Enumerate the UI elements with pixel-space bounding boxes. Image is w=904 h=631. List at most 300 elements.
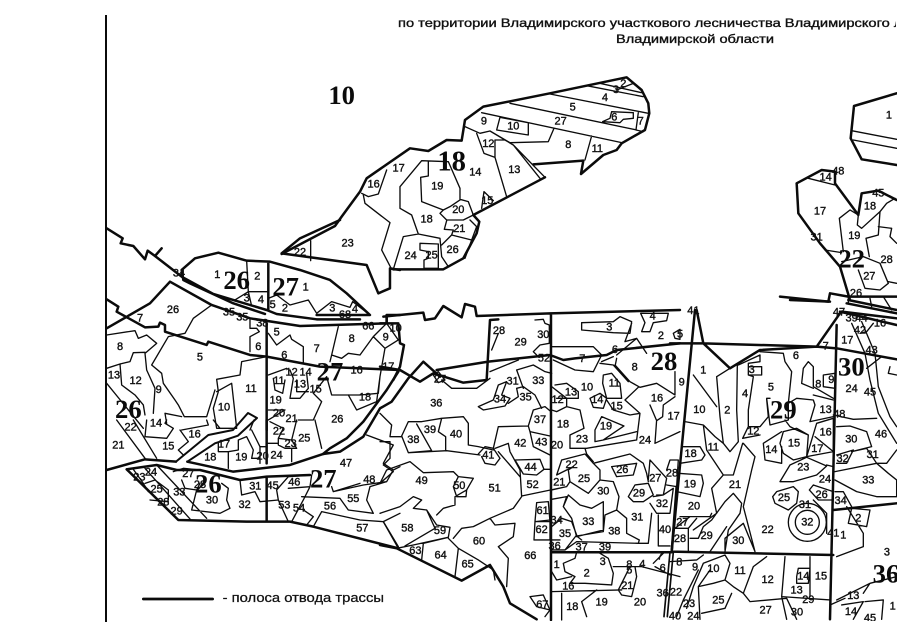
stand numbers: central: 15 [611, 401, 623, 413]
stand numbers: central: 38 [407, 434, 419, 446]
stand numbers: east: 47 [833, 306, 845, 318]
stand numbers: central: 35 [520, 392, 532, 404]
stand numbers: east: 43 [866, 345, 878, 357]
stand numbers: central: 29 [515, 337, 527, 349]
block numbers 26 and 27: 26 [223, 265, 250, 295]
stand numbers: upper blocks: 17 [382, 361, 394, 373]
stand numbers: block 18: 24 [405, 250, 417, 262]
stand numbers: upper blocks: 7 [314, 343, 320, 355]
stand numbers: upper blocks: 19 [270, 395, 282, 407]
stand numbers: central: 36 [430, 398, 442, 410]
stand numbers: east: 34 [835, 495, 847, 507]
stand numbers: east: 10 [693, 404, 705, 416]
stand numbers: central: 21 [553, 477, 565, 489]
stand numbers: block 22: 27 [863, 271, 875, 283]
stand numbers: upper blocks: 9 [383, 331, 389, 343]
stand numbers: block 18: 12 [482, 138, 494, 150]
stand numbers: central: 18 [557, 418, 569, 430]
stand numbers: upper blocks: 12 [286, 367, 298, 379]
stand numbers: east: 40 [669, 611, 681, 623]
block numbers 10 and 18: 10 [328, 80, 355, 110]
stand numbers: central: 20 [551, 439, 563, 451]
stand numbers: central: 67 [536, 599, 548, 611]
stand numbers: block 22: 18 [864, 201, 876, 213]
stand numbers: east: 9 [679, 376, 685, 388]
stand numbers: upper blocks: 35 [223, 307, 235, 319]
stand numbers: central: 12 [552, 394, 564, 406]
stand numbers: east: 45 [864, 386, 876, 398]
stand numbers: block 18: 22 [294, 247, 306, 259]
stand numbers: east: 6 [793, 350, 799, 362]
stand numbers: block 18: 11 [592, 143, 603, 155]
block numbers 26 and 27: 27 [317, 357, 343, 387]
stand numbers: central: 16 [562, 581, 574, 593]
stand numbers: east: 31 [867, 449, 879, 461]
stand numbers: central: 44 [525, 461, 537, 473]
stand numbers: central: 11 [609, 377, 620, 389]
road corridor through the centre [323, 362, 445, 454]
stand numbers: upper blocks: 1 [303, 281, 309, 293]
block numbers 29, 30, 36: 36 [873, 558, 899, 588]
stand numbers: east: 31 [799, 499, 811, 511]
stand numbers: block 18: 13 [508, 164, 520, 176]
stand numbers: central: 17 [668, 411, 680, 423]
stand numbers: lower blocks: 28 [157, 497, 169, 509]
blocks 26 and 27 upper [107, 220, 400, 430]
stand numbers: upper blocks: 66 [362, 321, 374, 333]
stand numbers: east: 21 [729, 479, 741, 491]
stand numbers: block 22: 26 [850, 287, 862, 299]
stand numbers: central: 14 [591, 394, 603, 406]
stand numbers: central: 34 [494, 393, 506, 405]
stand numbers: central [390, 311, 680, 613]
stand numbers: lower blocks: 54 [293, 502, 305, 514]
stand numbers: upper blocks: 9 [156, 384, 162, 396]
stand numbers: central: 63 [409, 545, 421, 557]
block numbers 26 and 27 (lower) [196, 470, 336, 493]
stand numbers: east: 5 [768, 382, 774, 394]
stand numbers: central: 40 [450, 428, 462, 440]
stand numbers: upper blocks: 4 [258, 294, 264, 306]
stand numbers: block 22: 19 [848, 230, 860, 242]
stand numbers: central: 23 [576, 433, 588, 445]
stand numbers: central: 26 [616, 464, 628, 476]
stand numbers: lower blocks: 20 [257, 451, 269, 463]
stand numbers: block 18: 14 [469, 167, 481, 179]
stand numbers: east: 9 [692, 562, 698, 574]
stand numbers: upper blocks: 38 [256, 318, 268, 330]
stand numbers: lower blocks: 55 [347, 493, 359, 505]
stand numbers: central: 38 [608, 526, 620, 538]
stand numbers: upper blocks: 12 [130, 375, 142, 387]
stand numbers: east: 10 [707, 563, 719, 575]
stand numbers: east: 1 [890, 601, 896, 613]
stand numbers: block 18: 9 [481, 116, 487, 128]
stand numbers: central: 52 [538, 352, 550, 364]
stand numbers: east: 23 [797, 462, 809, 474]
stand numbers: upper blocks: 4 [352, 303, 358, 315]
stand numbers: upper blocks: 34 [173, 267, 185, 279]
stand numbers: upper blocks: 10 [218, 402, 230, 414]
stand numbers: central: 3 [606, 321, 612, 333]
stand numbers: central: 30 [537, 329, 549, 341]
stand numbers: east: 22 [762, 524, 774, 536]
stand numbers: central: 37 [534, 414, 546, 426]
block numbers 26 and 27 [115, 265, 343, 424]
stand numbers: upper blocks: 5 [274, 326, 280, 338]
stand numbers: upper blocks: 68 [339, 309, 351, 321]
stand numbers: central: 2 [658, 330, 664, 342]
stand numbers: central: 6 [612, 344, 618, 356]
stand numbers: upper blocks: 26 [331, 413, 343, 425]
stand numbers: central: 32 [656, 498, 668, 510]
stand numbers: east: 8 [815, 378, 821, 390]
block number 28: 28 [651, 346, 677, 376]
stand numbers: block 18: 25 [426, 249, 438, 261]
stand numbers: upper blocks: 8 [349, 333, 355, 345]
stand numbers: east: 23 [683, 598, 695, 610]
stand numbers: central: 16 [651, 393, 663, 405]
stand numbers: east: 4 [742, 388, 748, 400]
title: Владимирской области [616, 32, 774, 46]
stand numbers: central: 58 [401, 522, 413, 534]
block 28 and central stands [380, 304, 680, 620]
stand numbers: central: 62 [536, 524, 548, 536]
stand numbers: lower blocks: 45 [267, 480, 279, 492]
stand numbers: lower blocks: 56 [324, 501, 336, 513]
stand numbers: central: 28 [493, 325, 505, 337]
stand numbers: lower blocks: 57 [356, 522, 368, 534]
stand numbers: block 18: 6 [611, 112, 617, 124]
block numbers 26 and 27 (lower): 27 [310, 463, 337, 493]
stand numbers: central: 18 [566, 601, 578, 613]
block numbers 29, 30, 36: 30 [838, 352, 865, 382]
stand numbers: block 18: 15 [481, 195, 493, 207]
stand numbers: central: 25 [578, 473, 590, 485]
stand numbers: block 18: 20 [452, 204, 464, 216]
stand numbers: central: 19 [600, 421, 612, 433]
stand numbers: east: 7 [823, 341, 829, 353]
stand numbers: block 18: 7 [638, 116, 644, 128]
stand numbers: central: 39 [424, 424, 436, 436]
stand numbers: east: 12 [747, 426, 759, 438]
stand numbers: east: 41 [687, 305, 699, 317]
stand numbers: lower blocks: 23 [285, 438, 297, 450]
stand numbers: block 18: 10 [507, 121, 519, 133]
stand numbers: block 18: 4 [602, 92, 608, 104]
stand numbers: block 18: 19 [431, 181, 443, 193]
stand numbers: central: 42 [514, 437, 526, 449]
stand numbers: block 22: 17 [814, 206, 826, 218]
stand numbers: upper blocks: 6 [281, 350, 287, 362]
stand numbers: central: 35 [559, 528, 571, 540]
stand numbers: east: 3 [749, 364, 755, 376]
stand numbers: lower blocks: 25 [298, 432, 310, 444]
map area [107, 77, 899, 624]
stand numbers: lower blocks: 25 [151, 483, 163, 495]
block number 22: 22 [838, 243, 865, 273]
stand numbers: east: 11 [734, 565, 746, 577]
stand numbers: east: 19 [684, 478, 696, 490]
stand numbers: upper blocks: 26 [167, 304, 179, 316]
stand numbers: east: 13 [791, 585, 803, 597]
stand numbers: east: 29 [701, 530, 713, 542]
stand numbers: central: 29 [633, 487, 645, 499]
stand numbers: upper blocks: 20 [273, 408, 285, 420]
stand numbers: east: 14 [765, 444, 777, 456]
stand numbers: central: 10 [390, 322, 402, 334]
stand numbers: block 22: 1 [886, 110, 892, 122]
stand numbers: east: 45 [864, 612, 876, 624]
stand numbers: central: 4 [639, 558, 645, 570]
stand numbers: east: 11 [708, 441, 719, 453]
stand numbers: central: 30 [597, 486, 609, 498]
stand numbers: lower blocks: 17 [218, 438, 230, 450]
stand numbers: central: 33 [582, 516, 594, 528]
stand numbers: east: 22 [670, 587, 682, 599]
stand numbers: block 18: 5 [570, 101, 576, 113]
stand numbers: east: 44 [856, 312, 868, 324]
stand numbers: central: 8 [632, 362, 638, 374]
stand numbers: lower blocks: 18 [204, 451, 216, 463]
stand numbers: east: 5 [677, 328, 683, 340]
stand numbers: east: 12 [762, 574, 774, 586]
stand numbers: lower blocks: 21 [112, 440, 124, 452]
stand numbers: upper blocks: 21 [286, 413, 298, 425]
stand numbers: east: 13 [820, 404, 832, 416]
block numbers 26 and 27: 27 [272, 272, 299, 302]
stand numbers: central: 61 [537, 505, 549, 517]
stand numbers: central: 24 [639, 435, 651, 447]
stand numbers: block 18: 18 [421, 213, 433, 225]
stand numbers: upper blocks: 3 [244, 292, 250, 304]
stand numbers: lower blocks: 47 [340, 457, 352, 469]
stand numbers: lower blocks: 24 [145, 466, 157, 478]
stand numbers: block 18: 21 [453, 223, 465, 235]
stand numbers: upper blocks [108, 267, 394, 429]
stand numbers: central: 10 [581, 381, 593, 393]
stand numbers: central: 7 [579, 353, 585, 365]
stand numbers: upper blocks: 2 [282, 302, 288, 314]
stand numbers: central: 33 [532, 375, 544, 387]
stand numbers: central: 7 [657, 551, 663, 563]
stand numbers: lower blocks: 31 [249, 481, 261, 493]
stand numbers: east: 32 [801, 517, 813, 529]
stand numbers: central: 13 [565, 387, 577, 399]
stand numbers: block 22: 31 [811, 232, 823, 244]
stand numbers: central: 31 [631, 512, 643, 524]
concentric stands 31 and 32 [788, 503, 826, 541]
stand numbers: upper blocks: 5 [270, 299, 276, 311]
stand numbers: block 18: 23 [342, 237, 354, 249]
stand numbers: upper blocks: 7 [137, 312, 143, 324]
stand numbers: central: 1 [554, 559, 560, 571]
stand numbers: central: 49 [416, 475, 428, 487]
stand numbers: block 18: 17 [393, 163, 405, 175]
stand numbers: east [669, 305, 896, 624]
stand numbers: east: 17 [811, 443, 823, 455]
stand numbers: lower blocks: 33 [173, 487, 185, 499]
stand numbers: central: 60 [473, 535, 485, 547]
stand numbers: central: 3 [600, 556, 606, 568]
stand numbers: upper blocks: 1 [214, 269, 220, 281]
stand numbers: east: 39 [846, 312, 858, 324]
stand numbers: east: 48 [833, 408, 845, 420]
block numbers 10 and 18 [330, 86, 465, 171]
stand numbers: central: 52 [527, 479, 539, 491]
stand numbers: upper blocks: 14 [150, 417, 162, 429]
stand numbers: upper blocks: 11 [273, 375, 285, 387]
stand numbers: central: 50 [453, 480, 465, 492]
stand numbers: block 22: 45 [872, 187, 884, 199]
blocks 26 and 27 lower [107, 413, 400, 605]
block numbers 26 and 27: 26 [115, 394, 142, 424]
stand numbers: lower blocks: 53 [278, 499, 290, 511]
stand numbers: east: 8 [676, 556, 682, 568]
stand numbers: east: 9 [828, 374, 834, 386]
stand numbers: block 18: 3 [613, 84, 619, 96]
stand numbers: upper blocks: 35 [236, 311, 248, 323]
stand numbers: east: 27 [760, 605, 772, 617]
stand numbers: east: 25 [778, 492, 790, 504]
stand numbers: east: 33 [862, 475, 874, 487]
stand numbers: east: 27 [676, 517, 688, 529]
stand numbers: central: 34 [551, 515, 563, 527]
stand numbers: east: 2 [724, 405, 730, 417]
stand numbers: lower blocks: 30 [206, 494, 218, 506]
stand numbers: lower blocks: 24 [271, 449, 283, 461]
stand numbers: central: 37 [576, 541, 588, 553]
stand numbers: block 18: 16 [368, 179, 380, 191]
stand numbers: central: 36 [657, 587, 669, 599]
stand numbers: block 18: 26 [447, 244, 459, 256]
legend: right-of-way strip: - полоса отвода трассы [223, 590, 384, 605]
stand numbers: east: 13 [847, 590, 859, 602]
block 18 [282, 77, 649, 269]
stand numbers: lower blocks: 28 [194, 479, 206, 491]
stand numbers: upper blocks: 3 [329, 302, 335, 314]
stand numbers: central: 51 [489, 483, 501, 495]
stand numbers: central: 59 [434, 525, 446, 537]
stand numbers: east: 3 [884, 547, 890, 559]
left frame line [105, 15, 107, 622]
stand numbers: east: 41 [827, 527, 839, 539]
stand numbers: lower blocks: 32 [239, 499, 251, 511]
stand numbers: east: 1 [840, 530, 846, 542]
stand numbers: central: 39 [599, 541, 611, 553]
block numbers 26 and 27 (lower): 26 [195, 468, 222, 498]
stand numbers: block 18: 2 [620, 78, 626, 90]
block numbers 10 and 18: 18 [437, 146, 466, 178]
stand numbers: east: 46 [875, 428, 887, 440]
stand numbers: central: 27 [434, 373, 446, 385]
stand numbers: central: 2 [584, 567, 590, 579]
stand numbers: east: 17 [841, 335, 853, 347]
stand numbers: east: 14 [845, 606, 857, 618]
stand numbers: central: 27 [649, 472, 661, 484]
stand numbers: central: 20 [634, 597, 646, 609]
stand numbers: block 22 [811, 110, 893, 299]
stand numbers: east: 28 [674, 533, 686, 545]
stand numbers: east: 16 [820, 427, 832, 439]
stand numbers: lower blocks [112, 421, 375, 534]
stand numbers: upper blocks: 15 [310, 383, 322, 395]
title [398, 16, 904, 46]
stand numbers: lower blocks: 46 [288, 477, 300, 489]
stand numbers: east: 1 [700, 365, 706, 377]
stand numbers: central: 8 [626, 559, 632, 571]
stand numbers: lower blocks: 15 [162, 441, 174, 453]
stand numbers: upper blocks: 13 [294, 379, 306, 391]
stand numbers: central: 64 [435, 550, 447, 562]
stand numbers: block 18: 27 [555, 116, 567, 128]
stand numbers: lower blocks: 22 [125, 421, 137, 433]
stand numbers: central: 21 [621, 580, 633, 592]
stand numbers: east: 26 [816, 489, 828, 501]
stand numbers: block 22: 48 [832, 166, 844, 178]
stand numbers: central: 19 [596, 597, 608, 609]
stand numbers: east: 18 [685, 448, 697, 460]
stand numbers: east: 14 [797, 571, 809, 583]
stand numbers: upper blocks: 2 [254, 271, 260, 283]
block 22 and upper right [780, 93, 897, 318]
stand numbers: upper blocks: 8 [117, 341, 123, 353]
stand numbers: central: 41 [482, 450, 494, 462]
stand numbers: lower blocks: 22 [273, 426, 285, 438]
stand numbers: block 22: 28 [881, 254, 893, 266]
stand numbers: upper blocks: 13 [108, 370, 120, 382]
stand numbers: east: 24 [819, 473, 831, 485]
stand numbers: upper blocks: 14 [300, 367, 312, 379]
stand numbers: central: 36 [549, 541, 561, 553]
stand numbers: lower blocks: 29 [171, 506, 183, 518]
stand numbers: upper blocks: 5 [197, 351, 203, 363]
block numbers 29, 30, 36 [770, 352, 899, 588]
stand numbers: upper blocks: 18 [359, 392, 371, 404]
block numbers 29, 30, 36: 29 [770, 394, 797, 424]
stand numbers: central: 28 [666, 467, 678, 479]
stand numbers: east: 24 [846, 383, 858, 395]
stand numbers: upper blocks: 16 [351, 365, 363, 377]
stand numbers: central: 5 [626, 565, 632, 577]
stand numbers: lower blocks: 19 [235, 451, 247, 463]
stand numbers: upper blocks: 6 [255, 341, 261, 353]
stand numbers: central: 22 [566, 459, 578, 471]
stand numbers: central: 4 [650, 311, 656, 323]
stand numbers: central: 31 [507, 376, 519, 388]
stand numbers: block 22: 14 [820, 171, 832, 183]
stand numbers: east: 24 [687, 611, 699, 623]
stand numbers: lower blocks: 23 [133, 471, 145, 483]
stand numbers: east: 15 [815, 571, 827, 583]
stand numbers: upper blocks: 11 [245, 383, 257, 395]
title: по территории Владимирского участкового лесничества Владимирского лесн [398, 16, 904, 30]
stand numbers: east: 42 [854, 325, 866, 337]
stand numbers: lower blocks: 48 [363, 474, 375, 486]
stand numbers: central: 65 [462, 558, 474, 570]
stand numbers: lower blocks: 16 [189, 429, 201, 441]
stand numbers: east: 32 [837, 453, 849, 465]
stand numbers: east: 30 [845, 433, 857, 445]
stand numbers: central: 66 [524, 550, 536, 562]
blocks 29, 30 and 36 [669, 300, 899, 624]
stand numbers: central: 40 [659, 524, 671, 536]
stand numbers: lower blocks: 27 [182, 468, 194, 480]
stand numbers: east: 2 [855, 512, 861, 524]
stand numbers: east: 15 [788, 437, 800, 449]
stand numbers: east: 20 [688, 500, 700, 512]
stand numbers: east: 30 [791, 607, 803, 619]
